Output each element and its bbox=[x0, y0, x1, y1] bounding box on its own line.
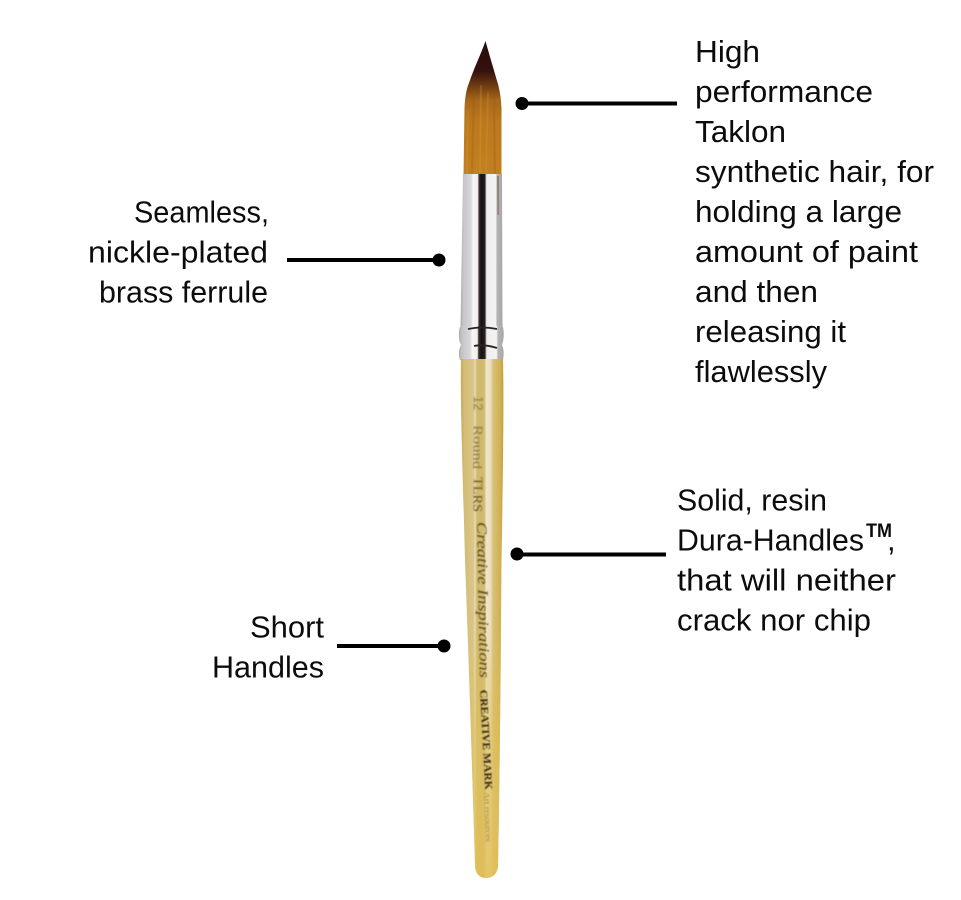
callout: short handles bbox=[212, 610, 450, 684]
callout: ferrule bbox=[88, 194, 446, 310]
text: hair description: Taklon bbox=[695, 114, 786, 149]
text: handle material description: , bbox=[887, 522, 896, 558]
handle shape name: Round bbox=[470, 425, 486, 470]
text: short handles description bbox=[212, 610, 324, 684]
brush hair bbox=[464, 41, 502, 176]
handle brand name: CREATIVE MARK bbox=[477, 690, 494, 790]
handle script brand line: Creative Inspirations bbox=[473, 522, 492, 678]
text: handle material description: Dura-Handles bbox=[677, 522, 864, 558]
leader line: hair bbox=[516, 97, 677, 110]
text: hair description bbox=[695, 34, 934, 389]
text: ferrule description bbox=[88, 194, 269, 310]
text: handle material description: crack nor chip bbox=[677, 602, 871, 638]
leader line: handle material bbox=[510, 548, 666, 560]
handle series code: TLRS bbox=[470, 477, 486, 512]
text: handle material description bbox=[677, 482, 896, 638]
text: hair description: holding a large bbox=[695, 194, 902, 229]
callout: handle material bbox=[510, 482, 896, 638]
text: handle material description: that will neither bbox=[677, 562, 896, 598]
handle size number: 12 bbox=[471, 396, 486, 411]
text: hair description: and then bbox=[695, 274, 818, 309]
text: ferrule description: Seamless, bbox=[134, 194, 269, 230]
leader line: short handles bbox=[337, 640, 450, 652]
text: hair description: amount of paint bbox=[695, 234, 918, 269]
text: hair description: flawlessly bbox=[695, 354, 827, 389]
text: hair description: synthetic hair, for bbox=[695, 154, 934, 189]
text: hair description: High bbox=[695, 34, 760, 69]
resin handle bbox=[461, 359, 503, 878]
text: handle material description: Solid, resin bbox=[677, 482, 827, 518]
text: short handles description: Handles bbox=[212, 650, 324, 684]
text: ferrule description: brass ferrule bbox=[99, 274, 268, 310]
handle fine print: Art resources bbox=[482, 792, 493, 842]
text: short handles description: Short bbox=[250, 610, 324, 644]
brush illustration bbox=[459, 41, 504, 878]
text: hair description: releasing it bbox=[695, 314, 846, 349]
text: hair description: performance bbox=[695, 74, 873, 109]
callout: hair bbox=[516, 34, 934, 389]
text: ferrule description: nickle-plated bbox=[88, 234, 268, 270]
nickel-plated ferrule bbox=[459, 174, 504, 360]
text: handle material description: TM bbox=[866, 521, 892, 542]
leader line: ferrule bbox=[287, 254, 446, 266]
